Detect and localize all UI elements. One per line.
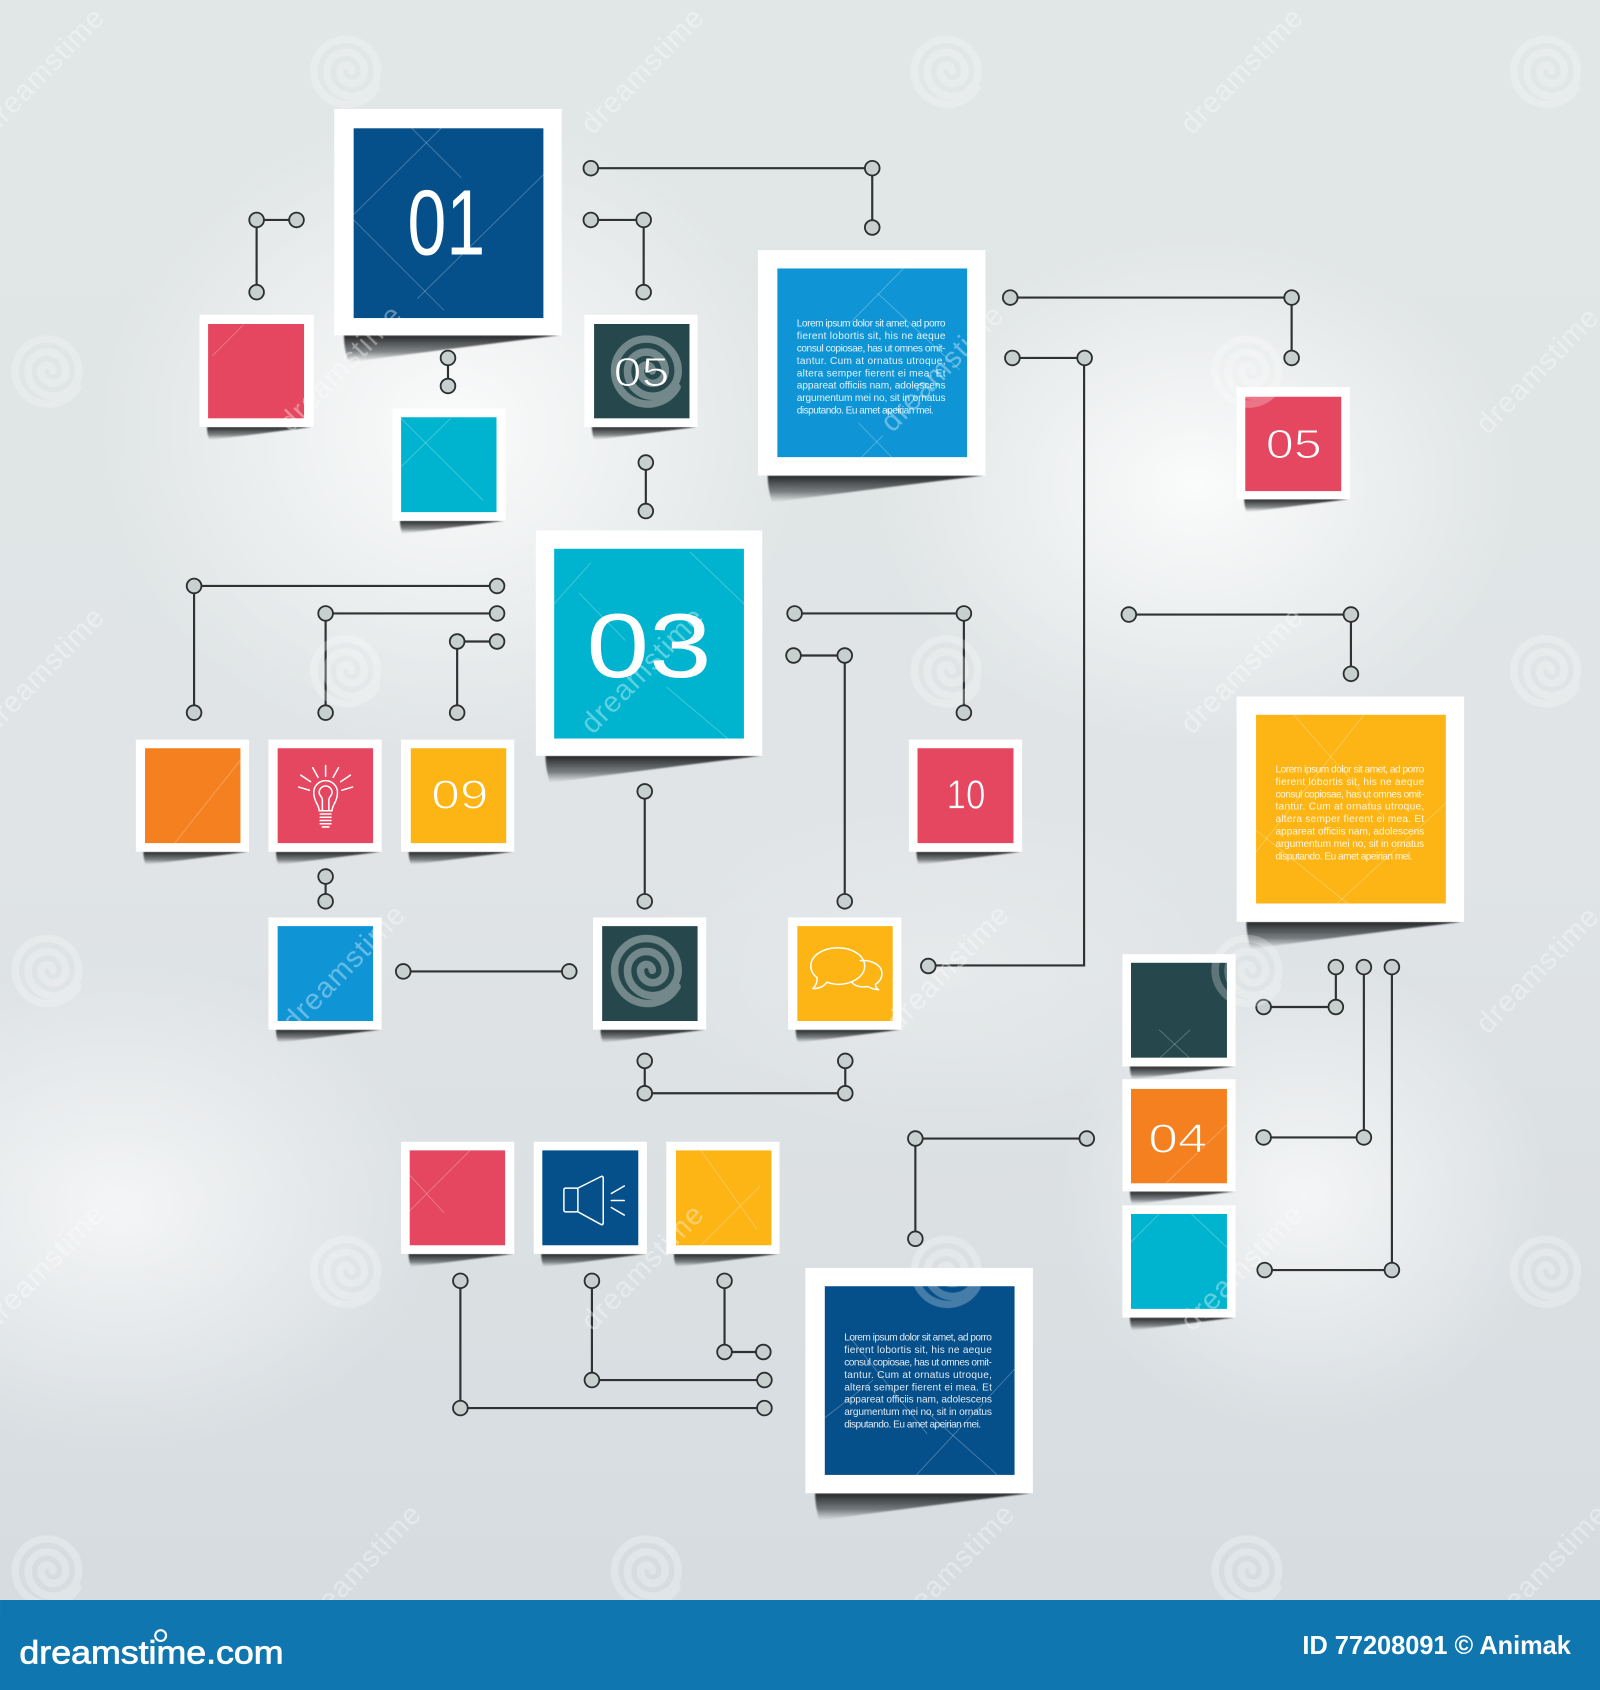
panel: navy speaker square (534, 1142, 647, 1267)
text block: altera semper fierent ei mea. Et (844, 1382, 992, 1393)
panel: dark square right (1122, 954, 1236, 1079)
panel: blue square (268, 918, 382, 1043)
panel: red 05: 05 (1266, 421, 1322, 467)
panel: 09 yellow: 09 (431, 772, 488, 818)
watermark text: dreamstime (1174, 1199, 1310, 1337)
panel: 04 orange: 04 (1148, 1116, 1208, 1162)
panel: teal square right (1122, 1205, 1236, 1330)
watermark text: dreamstime (273, 300, 408, 438)
text block: appareat officiis nam, adolescens (844, 1395, 992, 1406)
connector nodes (187, 161, 1399, 1415)
brand name: dreamstime.com (19, 1635, 284, 1671)
text block: argumentum mei no, sit in ornatus (844, 1407, 992, 1418)
text block: appareat officiis nam, adolescens (1275, 826, 1424, 837)
panel: blue text card (758, 250, 985, 502)
panel: red bulb square (268, 740, 382, 865)
panel: navy text card (805, 1268, 1033, 1520)
connector lines (194, 168, 1392, 1408)
text block: appareat officiis nam, adolescens (797, 381, 946, 392)
text block: argumentum mei no, sit in ornatus (797, 393, 946, 404)
panel: 09 yellow (401, 740, 514, 865)
panel: teal square (392, 409, 506, 534)
panel: yellow chat square (788, 918, 901, 1043)
icon: light bulb (299, 765, 353, 827)
text block: fierent lobortis sit, his ne aeque (797, 331, 946, 342)
panel: red square top left (199, 315, 314, 440)
text block (797, 319, 946, 416)
text block: consul copiosae, has ut omnes omit- (1275, 789, 1424, 800)
watermark text: dreamstime (1174, 2, 1310, 141)
text block: fierent lobortis sit, his ne aeque (1275, 777, 1425, 788)
panel: 04 orange (1122, 1079, 1236, 1204)
watermark text: dreamstime (575, 602, 710, 740)
text block: disputando. Eu amet apeirian mei. (1275, 851, 1412, 862)
watermark text: dreamstime (1174, 602, 1310, 740)
text block: fierent lobortis sit, his ne aeque (844, 1345, 992, 1356)
watermark text: dreamstime (276, 899, 412, 1038)
panel: 05 dark: 05 (613, 349, 670, 395)
image credit: ID 77208091 © Animak (1302, 1632, 1571, 1660)
panel: 10 red (909, 740, 1022, 865)
text block: altera semper fierent ei mea. Et (797, 368, 946, 379)
icon: speech bubbles (811, 948, 882, 990)
watermark text: dreamstime (292, 1499, 428, 1637)
text block: Lorem ipsum dolor sit amet, ad porro (797, 319, 946, 330)
panel: yellow text card (1237, 696, 1464, 949)
panel: 01 navy (334, 109, 562, 362)
icon: speaker (564, 1176, 624, 1225)
watermark text: dreamstime (575, 2, 710, 141)
panel: 10 red: 10 (947, 772, 985, 818)
footer banner (0, 1600, 1600, 1690)
watermark text: dreamstime (885, 1499, 1021, 1637)
text block: consul copiosae, has ut omnes omit- (844, 1357, 992, 1368)
icon: brand spiral (155, 1630, 166, 1641)
panel: red 05 (1237, 387, 1350, 512)
text block: consul copiosae, has ut omnes omit- (797, 343, 946, 354)
text block: disputando. Eu amet apeirian mei. (797, 405, 934, 416)
text block: disputando. Eu amet apeirian mei. (844, 1419, 981, 1430)
text block: tantur. Cum at ornatus utroque, (797, 356, 946, 367)
panel: orange square (136, 740, 249, 865)
panel: dark spiral square (593, 918, 706, 1043)
watermark text: dreamstime (575, 1199, 710, 1337)
panel: 01 navy: 01 (408, 170, 485, 274)
watermark spirals on dark boxes (615, 339, 678, 1004)
text block: tantur. Cum at ornatus utroque, (844, 1370, 992, 1381)
watermark text: dreamstime (875, 300, 1010, 438)
text block: Lorem ipsum dolor sit amet, ad porro (1275, 764, 1425, 775)
text block (1275, 764, 1425, 862)
text block (844, 1333, 992, 1430)
text block: Lorem ipsum dolor sit amet, ad porro (844, 1333, 992, 1344)
text block: argumentum mei no, sit in ornatus (1275, 839, 1424, 850)
panel: 03 teal: 03 (587, 596, 712, 697)
panel: 03 teal (536, 530, 762, 783)
panel: 05 dark (584, 315, 698, 440)
watermark text: dreamstime (880, 899, 1015, 1038)
text block: altera semper fierent ei mea. Et (1275, 814, 1424, 825)
text block: tantur. Cum at ornatus utroque, (1275, 802, 1424, 813)
panel: yellow square bottom (666, 1142, 780, 1267)
panel: red square bottom (401, 1142, 514, 1267)
